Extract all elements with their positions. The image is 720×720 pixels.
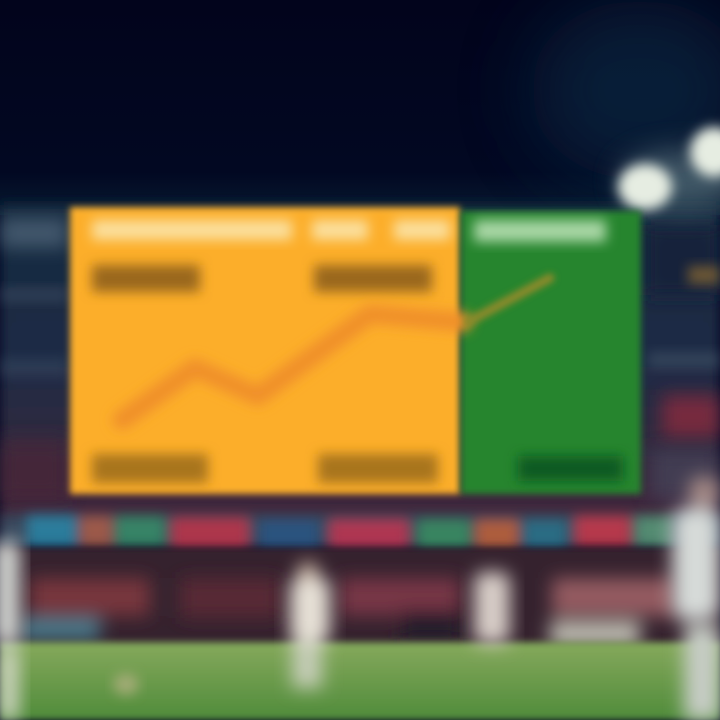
LED advertising ribbon	[0, 514, 720, 550]
distant ball	[113, 673, 139, 695]
heading: yellow panel header bar	[92, 220, 450, 240]
panel: yellow scoreboard	[70, 207, 460, 494]
heading: green panel header bar	[474, 220, 606, 242]
text block: green panel lower	[518, 456, 623, 481]
floodlights	[618, 127, 720, 210]
pitch	[0, 642, 720, 720]
night sky	[0, 0, 720, 215]
panel: green scoreboard	[461, 211, 641, 494]
stands backdrop	[0, 205, 720, 525]
text block: lower left	[92, 454, 208, 483]
line chart: orange trend	[122, 314, 462, 420]
player: far right	[672, 476, 720, 720]
player: centre right	[474, 572, 510, 644]
text block: upper right	[314, 265, 432, 292]
text block: lower right	[318, 454, 438, 483]
player: centre	[290, 562, 330, 688]
scoreboard	[70, 207, 641, 494]
text block: upper left	[92, 265, 200, 292]
line chart: green panel trend	[468, 278, 550, 322]
player: far left	[0, 540, 20, 720]
crowd stands	[0, 548, 720, 646]
